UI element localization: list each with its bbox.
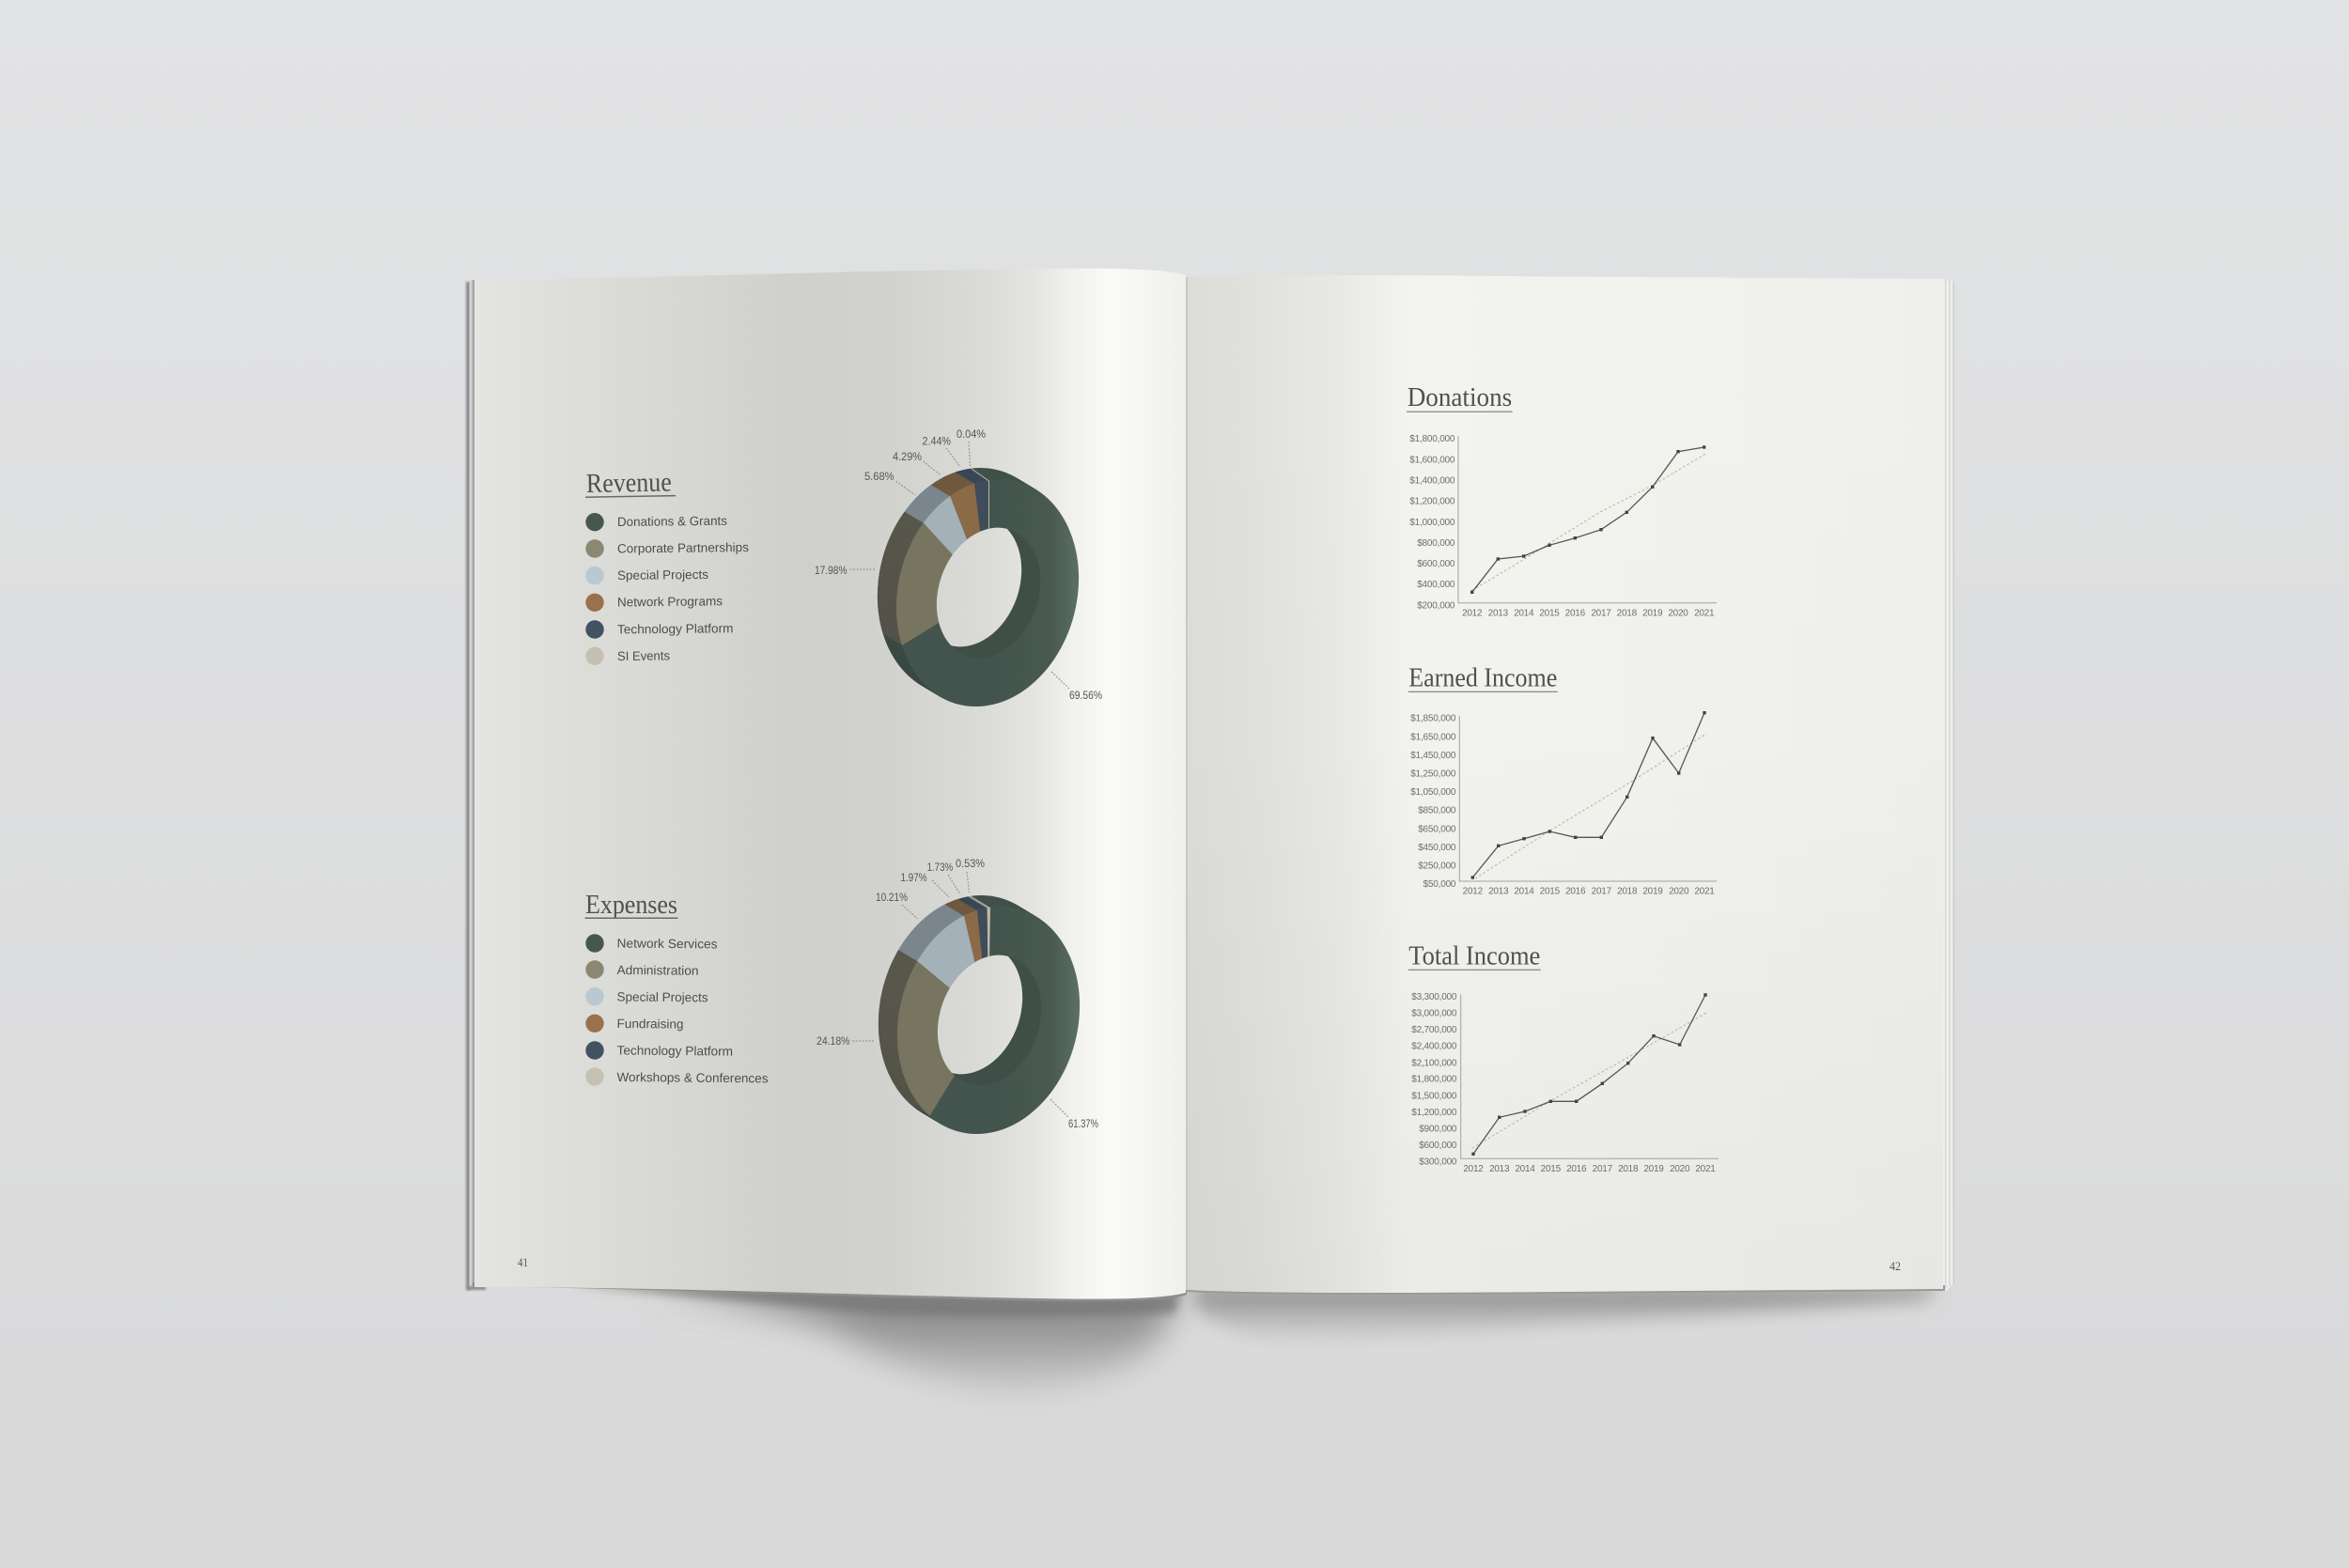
page number 42: 42 xyxy=(1890,1259,1901,1273)
line chart: earned income xyxy=(1459,711,1717,881)
page number 41: 41 xyxy=(518,1255,528,1269)
y axis labels: $650,000 xyxy=(1418,824,1456,834)
legend item: Network Services: Network Services xyxy=(616,937,718,951)
label: 1.97%: 1.97% xyxy=(900,873,926,884)
heading: Revenue: Revenue xyxy=(586,467,672,499)
y axis labels xyxy=(1410,714,1456,890)
y axis labels: $600,000 xyxy=(1417,559,1455,569)
label: 24.18%: 24.18% xyxy=(817,1036,849,1048)
label: 1.73% xyxy=(927,862,960,894)
y axis labels: $1,200,000 xyxy=(1409,497,1455,507)
shadow under right page xyxy=(1191,1287,1937,1339)
x axis labels: 2019 xyxy=(1642,609,1663,618)
x axis labels: 2015 xyxy=(1539,609,1560,618)
y axis labels: $1,400,000 xyxy=(1409,475,1455,486)
legend item: Administration: Administration xyxy=(616,963,699,978)
legend item: Network Programs: Network Programs xyxy=(617,594,723,609)
y axis labels: $1,000,000 xyxy=(1409,518,1455,528)
chart panel: Total Income xyxy=(1408,942,1719,1174)
legend item: Special Projects: Special Projects xyxy=(616,990,708,1004)
y axis labels: $1,200,000 xyxy=(1411,1108,1457,1118)
x axis labels: 2014 xyxy=(1514,609,1534,618)
label: 1.97% xyxy=(900,873,949,897)
x axis labels: 2017 xyxy=(1591,609,1611,618)
y axis labels: $900,000 xyxy=(1419,1125,1457,1135)
label: 24.18% xyxy=(817,1036,876,1048)
legend item: Corporate Partnerships: Corporate Partnerships xyxy=(617,540,749,555)
x axis labels xyxy=(1463,887,1715,896)
line chart: donations xyxy=(1458,436,1717,603)
data labels: expenses xyxy=(817,859,1098,1130)
x axis labels: 2020 xyxy=(1668,609,1688,618)
x axis labels: 2019 xyxy=(1643,1164,1664,1174)
legend item: Donations & Grants: Donations & Grants xyxy=(617,514,727,529)
legend item: Special Projects xyxy=(585,567,708,584)
legend item: Workshops & Conferences: Workshops & Conferences xyxy=(616,1070,769,1085)
y axis labels: $1,800,000 xyxy=(1409,434,1455,444)
chart panel: Earned Income xyxy=(1408,664,1717,896)
y axis labels: $1,250,000 xyxy=(1410,769,1456,780)
x axis labels: 2021 xyxy=(1695,1164,1716,1174)
y axis labels: $1,600,000 xyxy=(1409,455,1455,465)
x axis labels: 2021 xyxy=(1694,887,1715,896)
legend item: Network Programs xyxy=(585,594,723,612)
x axis labels: 2018 xyxy=(1617,887,1638,896)
x axis labels: 2019 xyxy=(1642,887,1663,896)
legend item: Workshops & Conferences xyxy=(585,1067,769,1086)
x axis labels: 2014 xyxy=(1514,887,1534,896)
y axis labels: $1,800,000 xyxy=(1411,1075,1457,1085)
x axis labels: 2017 xyxy=(1592,887,1612,896)
legend: expenses xyxy=(585,934,769,1086)
left page sheet edges xyxy=(467,280,486,1290)
x axis labels: 2015 xyxy=(1541,1164,1562,1174)
x axis labels: 2015 xyxy=(1540,887,1561,896)
y axis labels xyxy=(1409,434,1455,611)
contact shadow under left page xyxy=(573,1285,1182,1317)
x axis labels: 2018 xyxy=(1617,609,1638,618)
data labels: revenue xyxy=(815,429,1102,702)
left page bottom edge xyxy=(473,1282,1187,1301)
heading: Total Income: Total Income xyxy=(1408,942,1540,971)
x axis labels: 2012 xyxy=(1462,609,1483,618)
x axis labels xyxy=(1462,609,1715,618)
label: 5.68%: 5.68% xyxy=(864,472,894,483)
legend item: Special Projects xyxy=(585,987,708,1005)
legend item: Fundraising: Fundraising xyxy=(616,1017,684,1032)
y axis labels: $400,000 xyxy=(1417,580,1455,590)
heading: Donations: Donations xyxy=(1408,383,1512,412)
legend: revenue xyxy=(585,513,749,665)
panel: left page xyxy=(474,269,1186,1305)
label: 10.21%: 10.21% xyxy=(876,893,908,904)
x axis labels: 2013 xyxy=(1488,609,1509,618)
y axis labels: $600,000 xyxy=(1419,1141,1457,1151)
label: 61.37% xyxy=(1050,1099,1098,1130)
legend item: Technology Platform xyxy=(585,1041,733,1060)
x axis labels: 2017 xyxy=(1593,1164,1613,1174)
chart: expenses 3D donut xyxy=(878,895,1081,1134)
y axis labels: $1,650,000 xyxy=(1410,732,1456,742)
right page bottom edge xyxy=(1186,1285,1945,1295)
x axis labels: 2016 xyxy=(1566,1164,1587,1174)
y axis labels: $200,000 xyxy=(1417,600,1455,611)
x axis labels: 2013 xyxy=(1488,887,1509,896)
x axis labels xyxy=(1463,1164,1716,1174)
legend item: Corporate Partnerships xyxy=(585,539,749,558)
x axis labels: 2020 xyxy=(1669,887,1689,896)
y axis labels: $250,000 xyxy=(1418,861,1456,871)
label: 4.29% xyxy=(893,452,941,475)
legend item: Donations & Grants xyxy=(585,513,727,531)
label: 5.68% xyxy=(864,472,915,495)
chart: revenue 3D donut xyxy=(878,468,1079,706)
label: 10.21% xyxy=(876,893,917,919)
right page sheet edges xyxy=(1941,279,1954,1291)
x axis labels: 2012 xyxy=(1463,1164,1484,1174)
label: 0.53% xyxy=(956,859,985,893)
legend item: Special Projects: Special Projects xyxy=(617,567,708,582)
y axis labels: $1,850,000 xyxy=(1410,714,1456,724)
y axis labels: $300,000 xyxy=(1419,1157,1457,1168)
legend item: Network Services xyxy=(585,934,718,953)
panel: right page xyxy=(1186,275,1943,1293)
x axis labels: 2018 xyxy=(1618,1164,1639,1174)
legend item: Administration xyxy=(585,960,699,979)
x axis labels: 2013 xyxy=(1489,1164,1510,1174)
y axis labels: $1,500,000 xyxy=(1411,1091,1457,1101)
label: 0.04%: 0.04% xyxy=(957,429,986,441)
y axis labels: $1,050,000 xyxy=(1410,787,1456,798)
x axis labels: 2016 xyxy=(1565,887,1586,896)
y axis labels xyxy=(1411,992,1457,1168)
y axis labels: $3,300,000 xyxy=(1411,992,1457,1002)
y axis labels: $3,000,000 xyxy=(1411,1008,1457,1018)
legend item: SI Events xyxy=(585,647,670,665)
label: 17.98% xyxy=(815,566,876,577)
heading: Expenses: Expenses xyxy=(585,890,677,920)
y axis labels: $2,100,000 xyxy=(1411,1058,1457,1068)
x axis labels: 2012 xyxy=(1463,887,1484,896)
label: 17.98%: 17.98% xyxy=(815,566,848,577)
legend item: Fundraising xyxy=(585,1015,684,1032)
label: 2.44%: 2.44% xyxy=(923,436,951,447)
y axis labels: $2,400,000 xyxy=(1411,1042,1457,1052)
label: 0.53%: 0.53% xyxy=(956,859,985,870)
line chart: total income xyxy=(1461,993,1719,1158)
label: 69.56%: 69.56% xyxy=(1069,691,1102,702)
left edge soft line xyxy=(466,282,471,1290)
y axis labels: $850,000 xyxy=(1418,806,1456,816)
legend item: Technology Platform xyxy=(585,620,734,639)
legend item: Technology Platform: Technology Platform xyxy=(617,621,734,636)
label: 2.44% xyxy=(923,436,960,467)
label: 0.04% xyxy=(957,429,986,466)
x axis labels: 2020 xyxy=(1670,1164,1690,1174)
x axis labels: 2016 xyxy=(1565,609,1586,618)
heading: Earned Income: Earned Income xyxy=(1408,664,1557,693)
legend item: Technology Platform: Technology Platform xyxy=(616,1044,733,1059)
y axis labels: $50,000 xyxy=(1423,879,1456,890)
magazine spread mockup xyxy=(464,269,1954,1407)
y axis labels: $800,000 xyxy=(1417,538,1455,549)
x axis labels: 2021 xyxy=(1694,609,1715,618)
y axis labels: $450,000 xyxy=(1418,843,1456,853)
x axis labels: 2014 xyxy=(1515,1164,1535,1174)
label: 1.73%: 1.73% xyxy=(927,862,953,874)
shadow lobe under left page xyxy=(648,1289,1179,1390)
y axis labels: $2,700,000 xyxy=(1411,1025,1457,1035)
label: 61.37%: 61.37% xyxy=(1068,1119,1098,1130)
legend item: SI Events: SI Events xyxy=(617,648,670,663)
label: 69.56% xyxy=(1051,672,1102,702)
chart panel: Donations xyxy=(1407,383,1717,618)
y axis labels: $1,450,000 xyxy=(1410,751,1456,761)
label: 4.29%: 4.29% xyxy=(893,452,922,463)
